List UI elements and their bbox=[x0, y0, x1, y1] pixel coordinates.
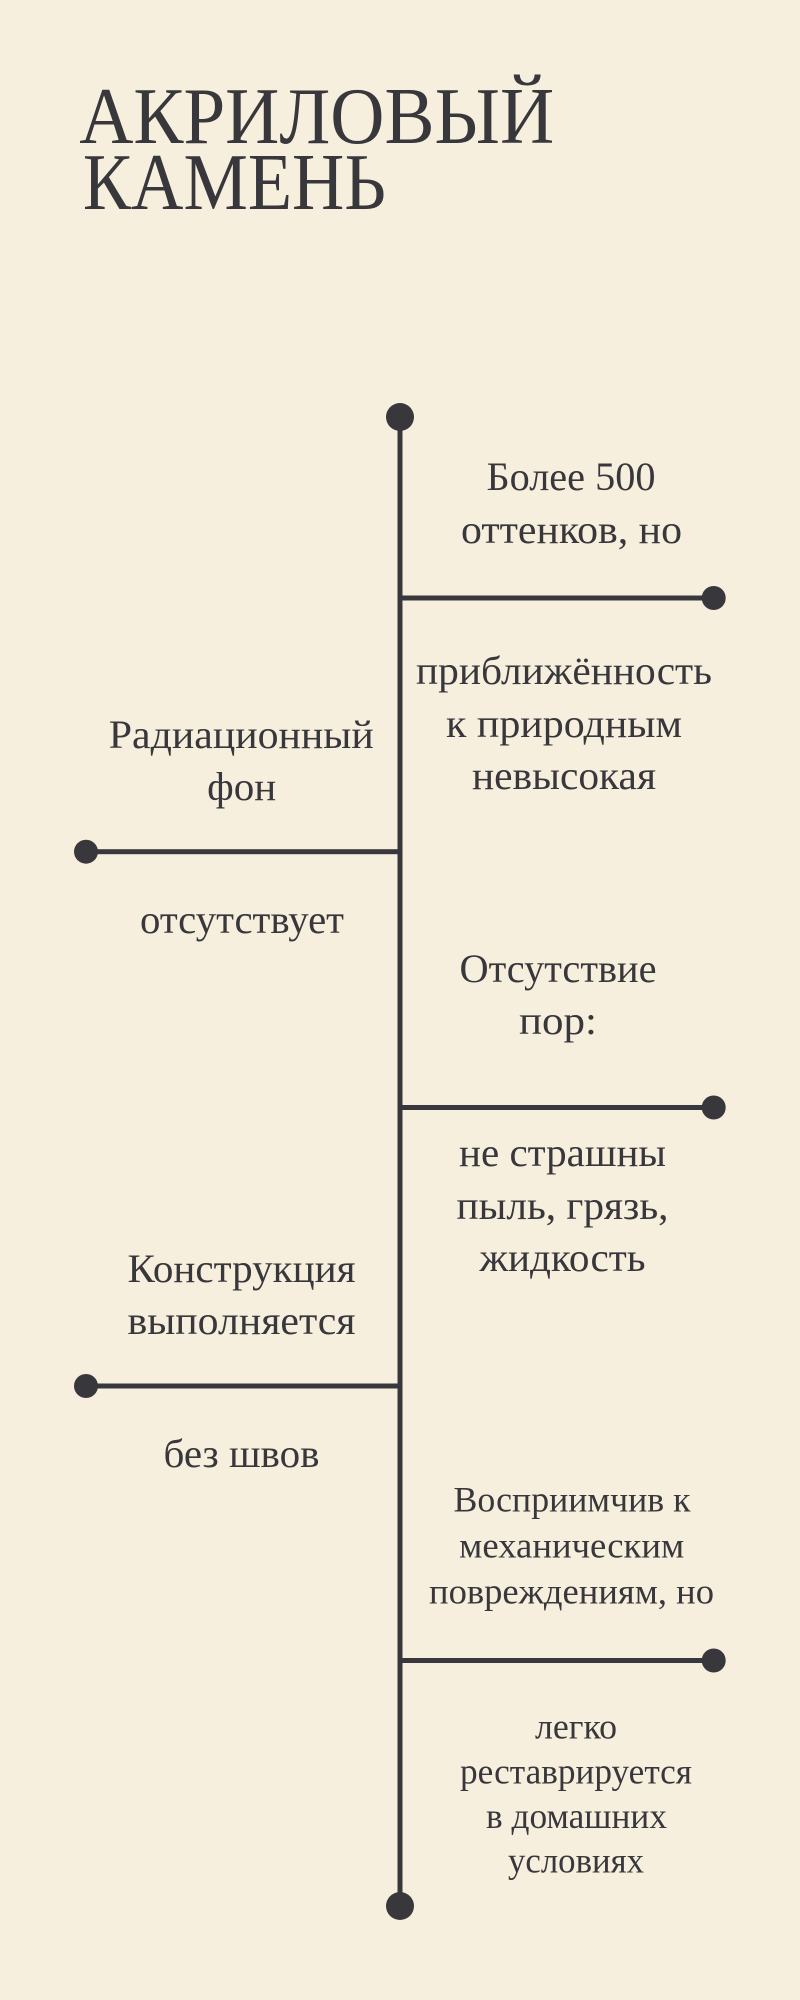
text below branch 3: пыль, грязь, bbox=[456, 1183, 668, 1228]
text below branch 5: легко bbox=[535, 1706, 617, 1746]
text above branch 4: Конструкция bbox=[128, 1246, 356, 1291]
text below branch 5 bbox=[460, 1706, 692, 1880]
timeline axis bbox=[386, 403, 414, 1920]
text above branch 2 bbox=[109, 712, 374, 809]
connector 4 bbox=[74, 1374, 400, 1398]
text above branch 5: Восприимчив к bbox=[454, 1480, 691, 1520]
text below branch 4: без швов bbox=[164, 1431, 320, 1476]
text above branch 3: Отсутствие bbox=[460, 946, 656, 991]
text below branch 3: не страшны bbox=[459, 1130, 666, 1175]
text below branch 5: условиях bbox=[508, 1840, 644, 1880]
text above branch 5: механическим bbox=[459, 1526, 684, 1566]
text below branch 5: в домашних bbox=[486, 1796, 667, 1836]
branch 5: repair bbox=[400, 1480, 726, 1880]
connector 3 bbox=[400, 1096, 726, 1120]
text above branch 5 bbox=[429, 1480, 714, 1612]
text above branch 3 bbox=[460, 946, 656, 1043]
text above branch 5: повреждениям, но bbox=[429, 1572, 714, 1612]
text above branch 3: пор: bbox=[519, 998, 597, 1043]
text above branch 1: оттенков, но bbox=[461, 507, 682, 552]
text below branch 5: реставрируется bbox=[460, 1752, 692, 1792]
text above branch 4: выполняется bbox=[128, 1298, 356, 1343]
branch 2: radiation bbox=[74, 712, 400, 942]
title: КАМЕНЬ bbox=[83, 139, 386, 227]
text below branch 3 bbox=[456, 1130, 668, 1280]
text above branch 2: Радиационный bbox=[109, 712, 374, 757]
text below branch 2: отсутствует bbox=[140, 897, 344, 942]
branch 1: shades bbox=[400, 454, 726, 798]
connector 2 bbox=[74, 840, 400, 864]
text below branch 1: приближённость bbox=[416, 648, 712, 693]
title: АКРИЛОВЫЙ bbox=[79, 73, 554, 161]
text below branch 1 bbox=[416, 648, 712, 798]
text above branch 1 bbox=[461, 454, 682, 552]
connector 5 bbox=[400, 1648, 726, 1672]
title bbox=[79, 73, 554, 227]
text above branch 1: Более 500 bbox=[486, 454, 656, 499]
text below branch 3: жидкость bbox=[478, 1235, 646, 1280]
text above branch 4 bbox=[128, 1246, 356, 1343]
connector 1 bbox=[400, 586, 726, 610]
text below branch 1: к природным bbox=[446, 701, 682, 746]
text below branch 1: невысокая bbox=[472, 753, 656, 798]
text above branch 2: фон bbox=[207, 764, 276, 809]
branch 3: no pores bbox=[400, 946, 726, 1280]
branch 4: seamless bbox=[74, 1246, 400, 1476]
